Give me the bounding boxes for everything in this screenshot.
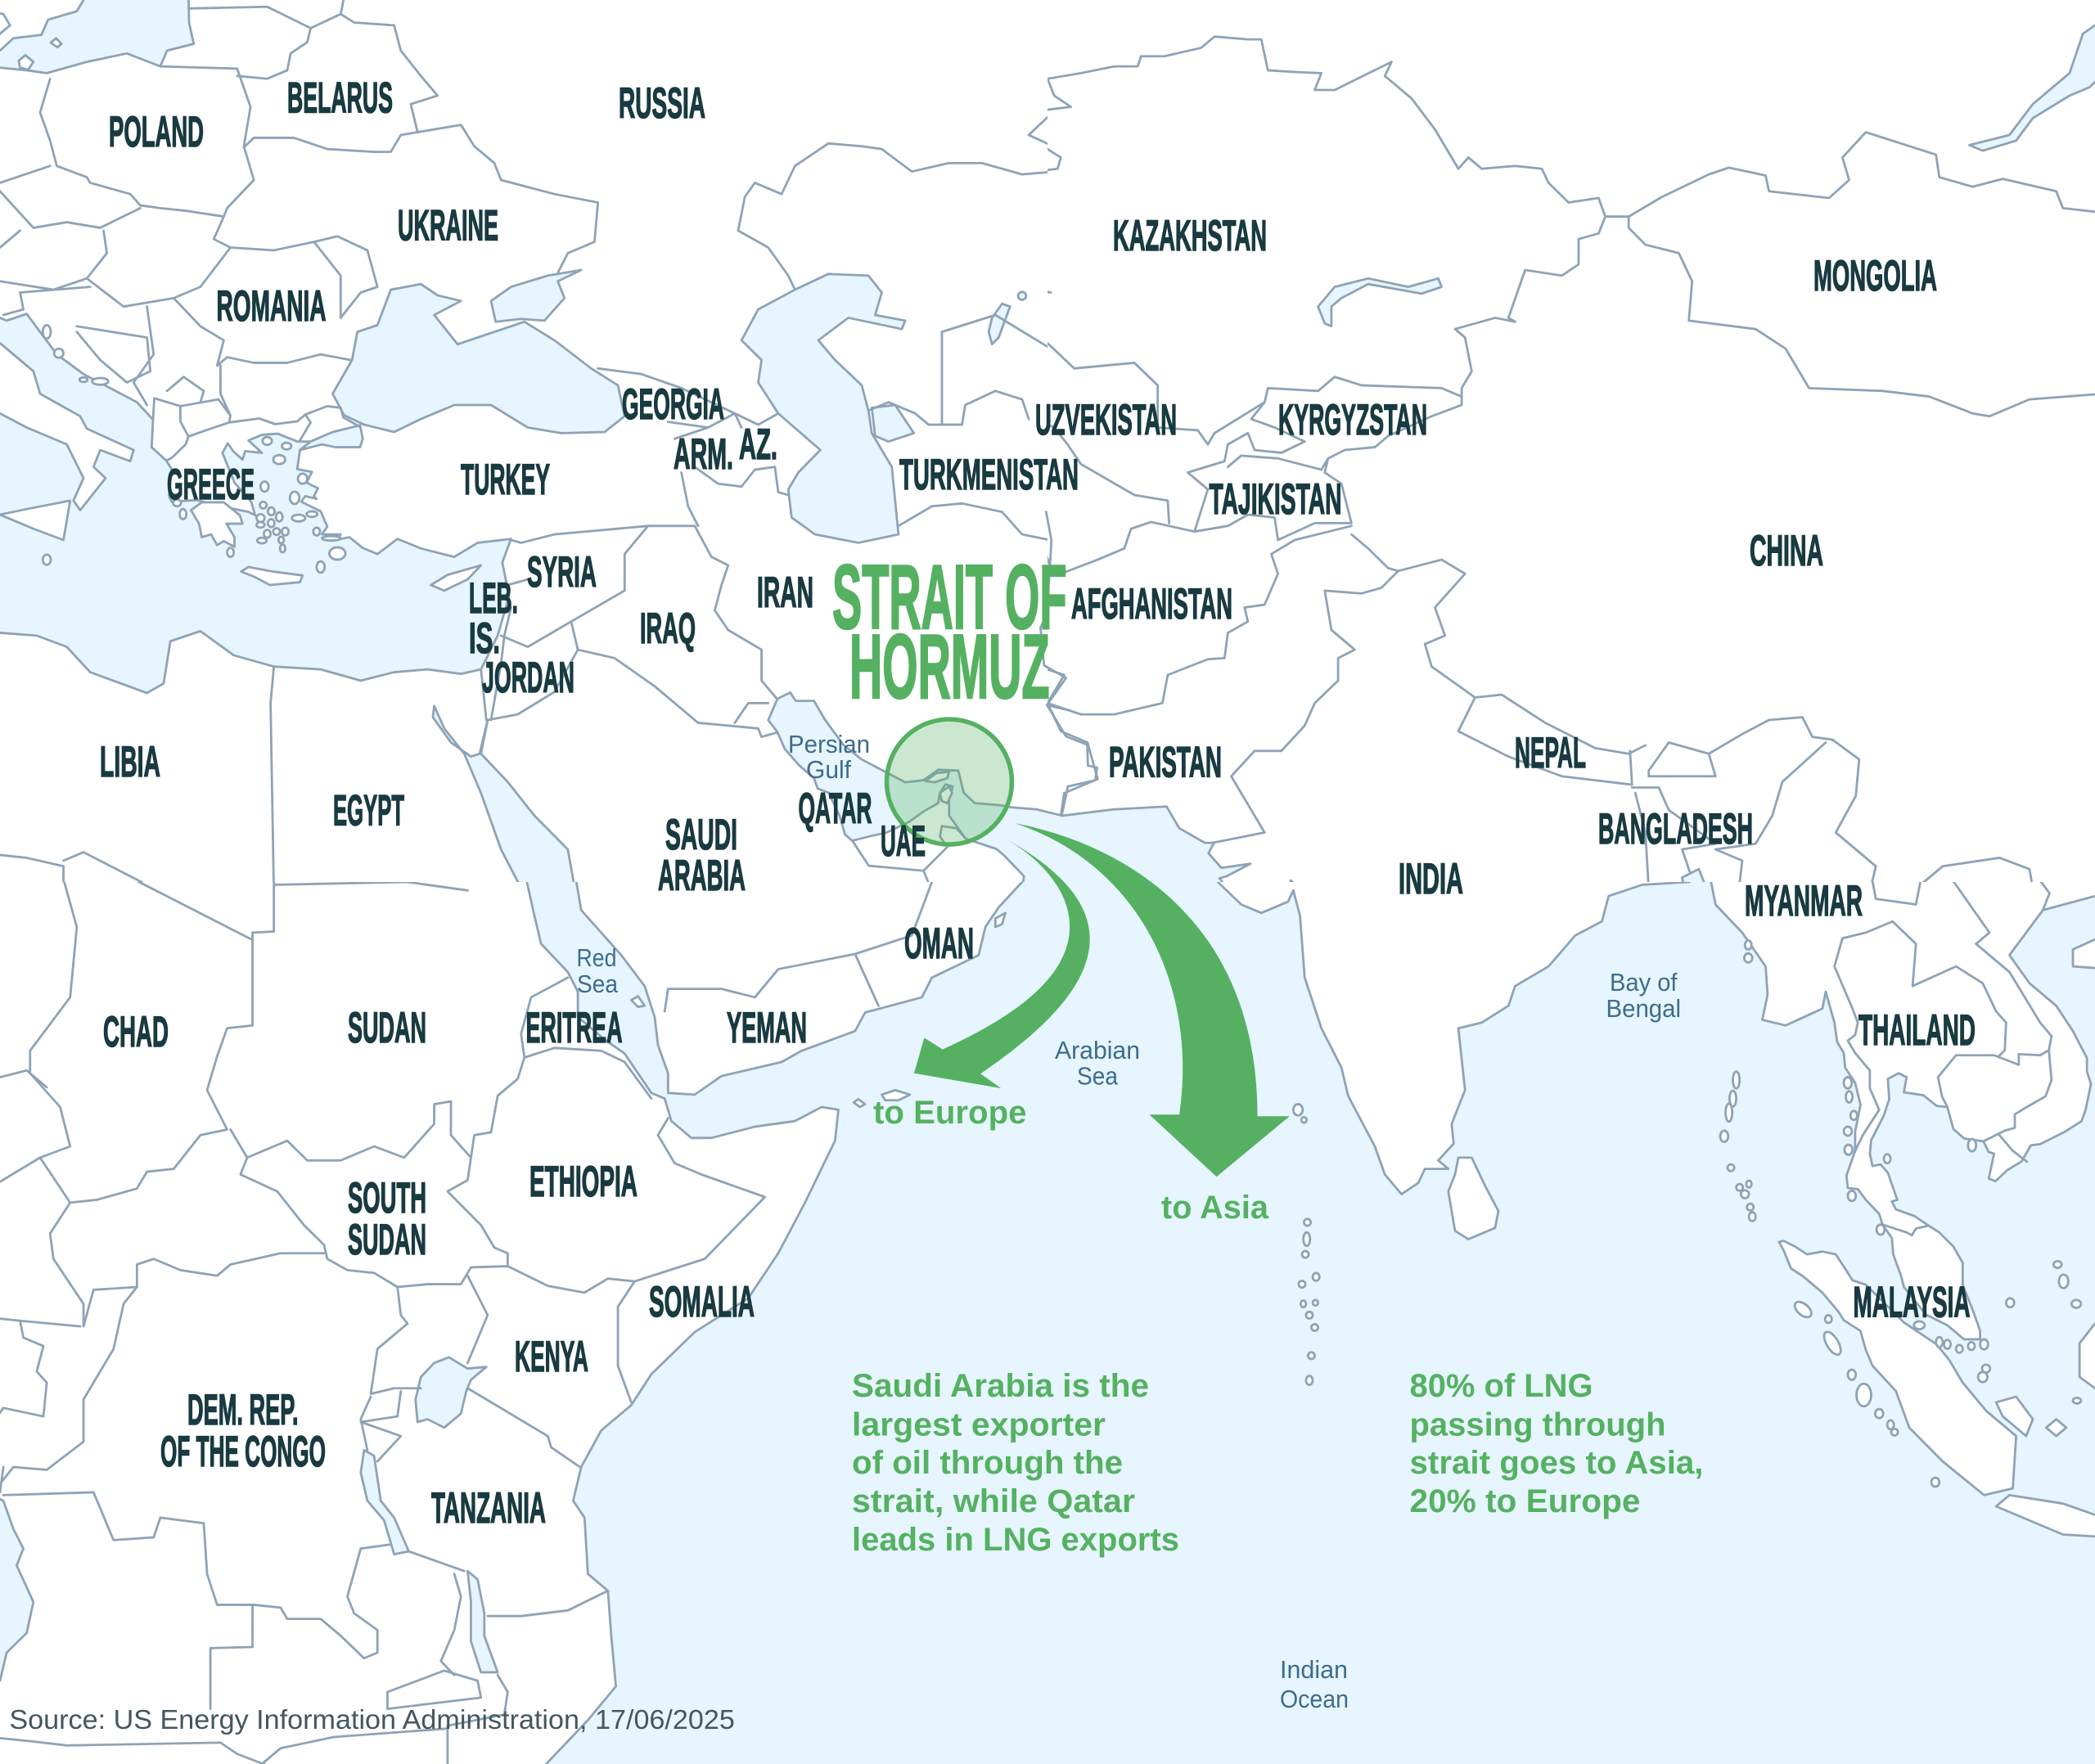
label: Mongolia: MONGOLIA (1813, 252, 1937, 300)
label: Tanzania: TANZANIA (431, 1484, 546, 1532)
country labels: OF THE CONGO (160, 1428, 326, 1476)
sea label: Bay of Bengal: Bay of (1610, 968, 1678, 997)
label: Somalia: SOMALIA (649, 1278, 755, 1326)
label: Saudi Arabia: ARABIA (658, 852, 746, 900)
arrow label: to Asia: to Asia (1161, 1190, 1269, 1226)
label: Afghanistan: AFGHANISTAN (1071, 580, 1232, 628)
country labels: UAE (881, 817, 926, 866)
country labels (100, 74, 1976, 1532)
arrow: to Asia (1015, 823, 1290, 1177)
label: DR Congo (160, 1386, 326, 1476)
map: Indian Ocean and South-East Asia quadrant (1034, 871, 2095, 1764)
sea label: Indian Ocean: Ocean (1280, 1685, 1349, 1713)
label: Eritrea: ERITREA (525, 1004, 622, 1052)
label: Myanmar: MYANMAR (1745, 877, 1863, 925)
label: Ethiopia: ETHIOPIA (529, 1158, 638, 1206)
country labels: LEB. (469, 574, 518, 623)
text block: LNG destinations: 80% of LNG (1409, 1368, 1593, 1404)
label: Yemen: YEMAN (727, 1004, 807, 1052)
label: India: INDIA (1399, 855, 1463, 903)
arrow label: to Europe: to Europe (873, 1095, 1026, 1131)
label: Turkey: TURKEY (461, 456, 550, 504)
country labels: NEPAL (1515, 729, 1586, 777)
sea label: Indian Ocean: Indian (1280, 1655, 1348, 1684)
map: Persian Gulf and Gulf of Oman coast (767, 511, 1295, 882)
sea label: Red Sea (576, 943, 619, 998)
label: Russia: RUSSIA (619, 79, 705, 128)
label: Turkmenistan: TURKMENISTAN (899, 451, 1079, 499)
sea label: Indian Ocean (1280, 1655, 1349, 1713)
sea label: Persian Gulf: Persian (788, 730, 870, 758)
label: Poland: POLAND (109, 108, 204, 156)
text block: Saudi Arabia and Qatar: Saudi Arabia is the (852, 1368, 1149, 1404)
label: South Sudan (348, 1174, 426, 1264)
label: DR Congo: DEM. REP. (187, 1386, 298, 1434)
label: Kazakhstan: KAZAKHSTAN (1113, 212, 1267, 260)
sea label: Persian Gulf (788, 730, 870, 784)
map: Africa quadrant (0, 871, 1069, 1764)
label: Kyrgyzstan: KYRGYZSTAN (1278, 396, 1427, 444)
label: Pakistan: PAKISTAN (1109, 738, 1222, 787)
sea label: Arabian Sea (1055, 1036, 1140, 1090)
sea label: Red Sea: Red (576, 943, 617, 972)
label: Belarus: BELARUS (287, 74, 393, 123)
label: Malaysia: MALAYSIA (1853, 1278, 1971, 1327)
label: Romania: ROMANIA (216, 282, 326, 331)
country labels: KENYA (515, 1333, 588, 1381)
sea label: Red Sea: Sea (577, 970, 619, 998)
sea label: Bay of Bengal (1606, 968, 1681, 1023)
text block: Saudi Arabia and Qatar: leads in LNG exports (852, 1522, 1179, 1558)
label: Libya: LIBIA (100, 738, 160, 786)
label: Uzbekistan: UZVEKISTAN (1035, 396, 1177, 444)
label: South Sudan: SUDAN (348, 1216, 426, 1264)
map: Central Asia quadrant (1034, 23, 2095, 894)
sea label: Arabian Sea: Sea (1077, 1062, 1119, 1090)
country labels: QATAR (799, 785, 872, 833)
title (832, 547, 1067, 718)
text block: LNG destinations: passing through (1409, 1407, 1666, 1443)
label: Iraq: IRAQ (640, 605, 696, 653)
label: South Sudan: SOUTH (348, 1174, 426, 1222)
text: STRAIT OF (832, 547, 1067, 648)
label: Iran: IRAN (757, 569, 813, 617)
source note: Source: US Energy Information Administration, 17/06/2025 (9, 1704, 735, 1735)
title: HORMUZ (849, 616, 1050, 718)
sea label: Persian Gulf: Gulf (806, 755, 851, 784)
label: Saudi Arabia (658, 811, 746, 900)
country labels: GEORGIA (622, 380, 724, 429)
arrows (914, 823, 1290, 1177)
label: Saudi Arabia: SAUDI (665, 811, 737, 859)
text block: LNG destinations: 20% to Europe (1409, 1483, 1640, 1519)
label: Syria: SYRIA (527, 548, 597, 596)
label: Bangladesh: BANGLADESH (1598, 805, 1753, 853)
label: Armenia: ARM. (674, 430, 733, 479)
label: Oman: OMAN (904, 920, 974, 968)
sea label: Bay of Bengal: Bengal (1606, 994, 1681, 1023)
label: Jordan: JORDAN (482, 654, 574, 702)
text block: Saudi Arabia and Qatar: of oil through the (852, 1445, 1123, 1481)
label: Tajikistan: TAJIKISTAN (1210, 475, 1342, 524)
text block: Saudi Arabia and Qatar: largest exporter (852, 1407, 1106, 1443)
sea labels (576, 730, 1681, 1713)
strait of Hormuz circle marker (887, 719, 1011, 844)
arrow: to Europe (914, 835, 1090, 1088)
label: China: CHINA (1750, 527, 1823, 575)
label: Azerbaijan: AZ. (739, 421, 777, 469)
text block: LNG destinations (1409, 1368, 1704, 1519)
country labels: EGYPT (333, 787, 404, 835)
label: Chad: CHAD (103, 1008, 169, 1056)
sea label: Arabian Sea: Arabian (1055, 1036, 1140, 1064)
country labels: GREECE (167, 461, 255, 509)
text block: Saudi Arabia and Qatar (852, 1368, 1179, 1558)
label: Israel: IS. (469, 614, 500, 663)
label: Thailand: THAILAND (1858, 1006, 1976, 1055)
text block: LNG destinations: strait goes to Asia, (1409, 1445, 1704, 1481)
text block: Saudi Arabia and Qatar: strait, while Qatar (852, 1483, 1135, 1519)
label: Sudan: SUDAN (348, 1004, 426, 1052)
label: Ukraine: UKRAINE (398, 202, 498, 250)
map: Europe and Middle East quadrant (0, 0, 1056, 894)
